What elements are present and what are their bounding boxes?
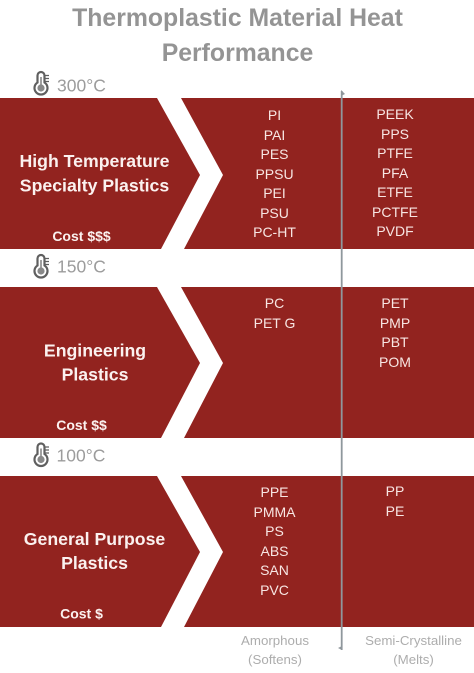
- chevron: general purpose label: [0, 476, 200, 627]
- semi-crystalline list: high temperature: PFA: [382, 165, 409, 181]
- semi-crystalline list: engineering: PET: [381, 295, 409, 311]
- temperature marker: 150°C: 150°C: [57, 257, 106, 277]
- temperature marker: 100°C: 100°C: [56, 446, 105, 466]
- band: high temperature specialty plastics: [0, 98, 474, 249]
- cost: medium: Cost $$: [56, 417, 107, 433]
- semi-crystalline list: general purpose: [386, 483, 404, 519]
- semi-crystalline list: engineering: PBT: [381, 334, 409, 350]
- amorphous list: general purpose: PMMA: [254, 504, 296, 520]
- amorphous list: high temperature: [253, 107, 296, 240]
- column label: amorphous: Amorphous: [241, 633, 309, 648]
- semi-crystalline list: high temperature: [372, 106, 418, 239]
- title: Thermoplastic Material Heat: [72, 5, 403, 32]
- amorphous list: general purpose: [254, 484, 296, 598]
- icon: thermometer: [34, 72, 49, 94]
- semi-crystalline list: engineering: [379, 295, 411, 370]
- title: Performance: [162, 40, 313, 67]
- amorphous list: high temperature: PEI: [263, 185, 286, 201]
- semi-crystalline list: engineering: POM: [379, 354, 411, 370]
- chevron: engineering label: [0, 287, 200, 438]
- amorphous list: general purpose: PVC: [260, 582, 289, 598]
- column label: amorphous: [241, 633, 309, 667]
- semi-crystalline list: high temperature: PPS: [381, 126, 409, 142]
- panel: high temperature materials: [181, 98, 474, 249]
- semi-crystalline list: high temperature: PTFE: [377, 145, 413, 161]
- amorphous list: general purpose: ABS: [260, 543, 289, 559]
- heading: high temperature specialty plastics: [19, 151, 170, 196]
- heading: engineering plastics: [44, 340, 146, 384]
- heading: engineering plastics: Engineering: [44, 340, 146, 360]
- amorphous list: general purpose: PS: [265, 523, 284, 539]
- icon: thermometer: [34, 444, 49, 466]
- amorphous list: high temperature: PI: [268, 107, 281, 123]
- amorphous list: high temperature: PES: [260, 146, 289, 162]
- cost: high: Cost $$$: [52, 228, 111, 244]
- semi-crystalline list: high temperature: PVDF: [376, 223, 414, 239]
- heading: general purpose plastics: [24, 529, 165, 573]
- panel: general purpose materials: [181, 476, 474, 627]
- heading: general purpose plastics: General Purpose: [24, 529, 165, 549]
- cost: low: Cost $: [60, 606, 103, 622]
- band: general purpose plastics: [0, 476, 474, 627]
- temperature marker: 300°C: 300°C: [57, 76, 106, 96]
- column label: semi-crystalline: [365, 633, 462, 667]
- semi-crystalline list: general purpose: PP: [386, 483, 404, 499]
- heading: general purpose plastics: Plastics: [61, 553, 128, 573]
- semi-crystalline list: engineering: PMP: [380, 315, 410, 331]
- chevron: high temperature label: [0, 98, 200, 249]
- amorphous list: engineering: PET G: [254, 315, 295, 331]
- temperature marker: 300°C: [34, 72, 106, 96]
- heading: high temperature specialty plastics: High Temperature: [19, 151, 170, 171]
- arrow: vertical double-headed divider: [338, 90, 345, 650]
- amorphous list: general purpose: PPE: [260, 484, 289, 500]
- temperature marker: 150°C: [34, 255, 106, 277]
- semi-crystalline list: high temperature: PCTFE: [372, 204, 418, 220]
- amorphous list: engineering: [254, 295, 295, 331]
- temperature marker: 100°C: [34, 444, 105, 466]
- column label: semi-crystalline: (Melts): [393, 652, 434, 667]
- panel: engineering materials: [181, 287, 474, 438]
- semi-crystalline list: high temperature: PEEK: [376, 106, 414, 122]
- heading: engineering plastics: Plastics: [62, 364, 129, 384]
- amorphous list: engineering: PC: [265, 295, 284, 311]
- amorphous list: high temperature: PAI: [264, 127, 285, 143]
- heading: high temperature specialty plastics: Specialty Plastics: [20, 176, 169, 196]
- amorphous list: high temperature: PC-HT: [253, 224, 296, 240]
- band: engineering plastics: [0, 287, 474, 438]
- column label: amorphous: (Softens): [248, 652, 302, 667]
- amorphous list: general purpose: SAN: [260, 562, 289, 578]
- column label: semi-crystalline: Semi-Crystalline: [365, 633, 462, 648]
- semi-crystalline list: high temperature: ETFE: [377, 184, 413, 200]
- semi-crystalline list: general purpose: PE: [386, 503, 404, 519]
- amorphous list: high temperature: PPSU: [255, 166, 294, 182]
- icon: thermometer: [34, 255, 49, 277]
- title: [72, 5, 403, 67]
- amorphous list: high temperature: PSU: [260, 205, 289, 221]
